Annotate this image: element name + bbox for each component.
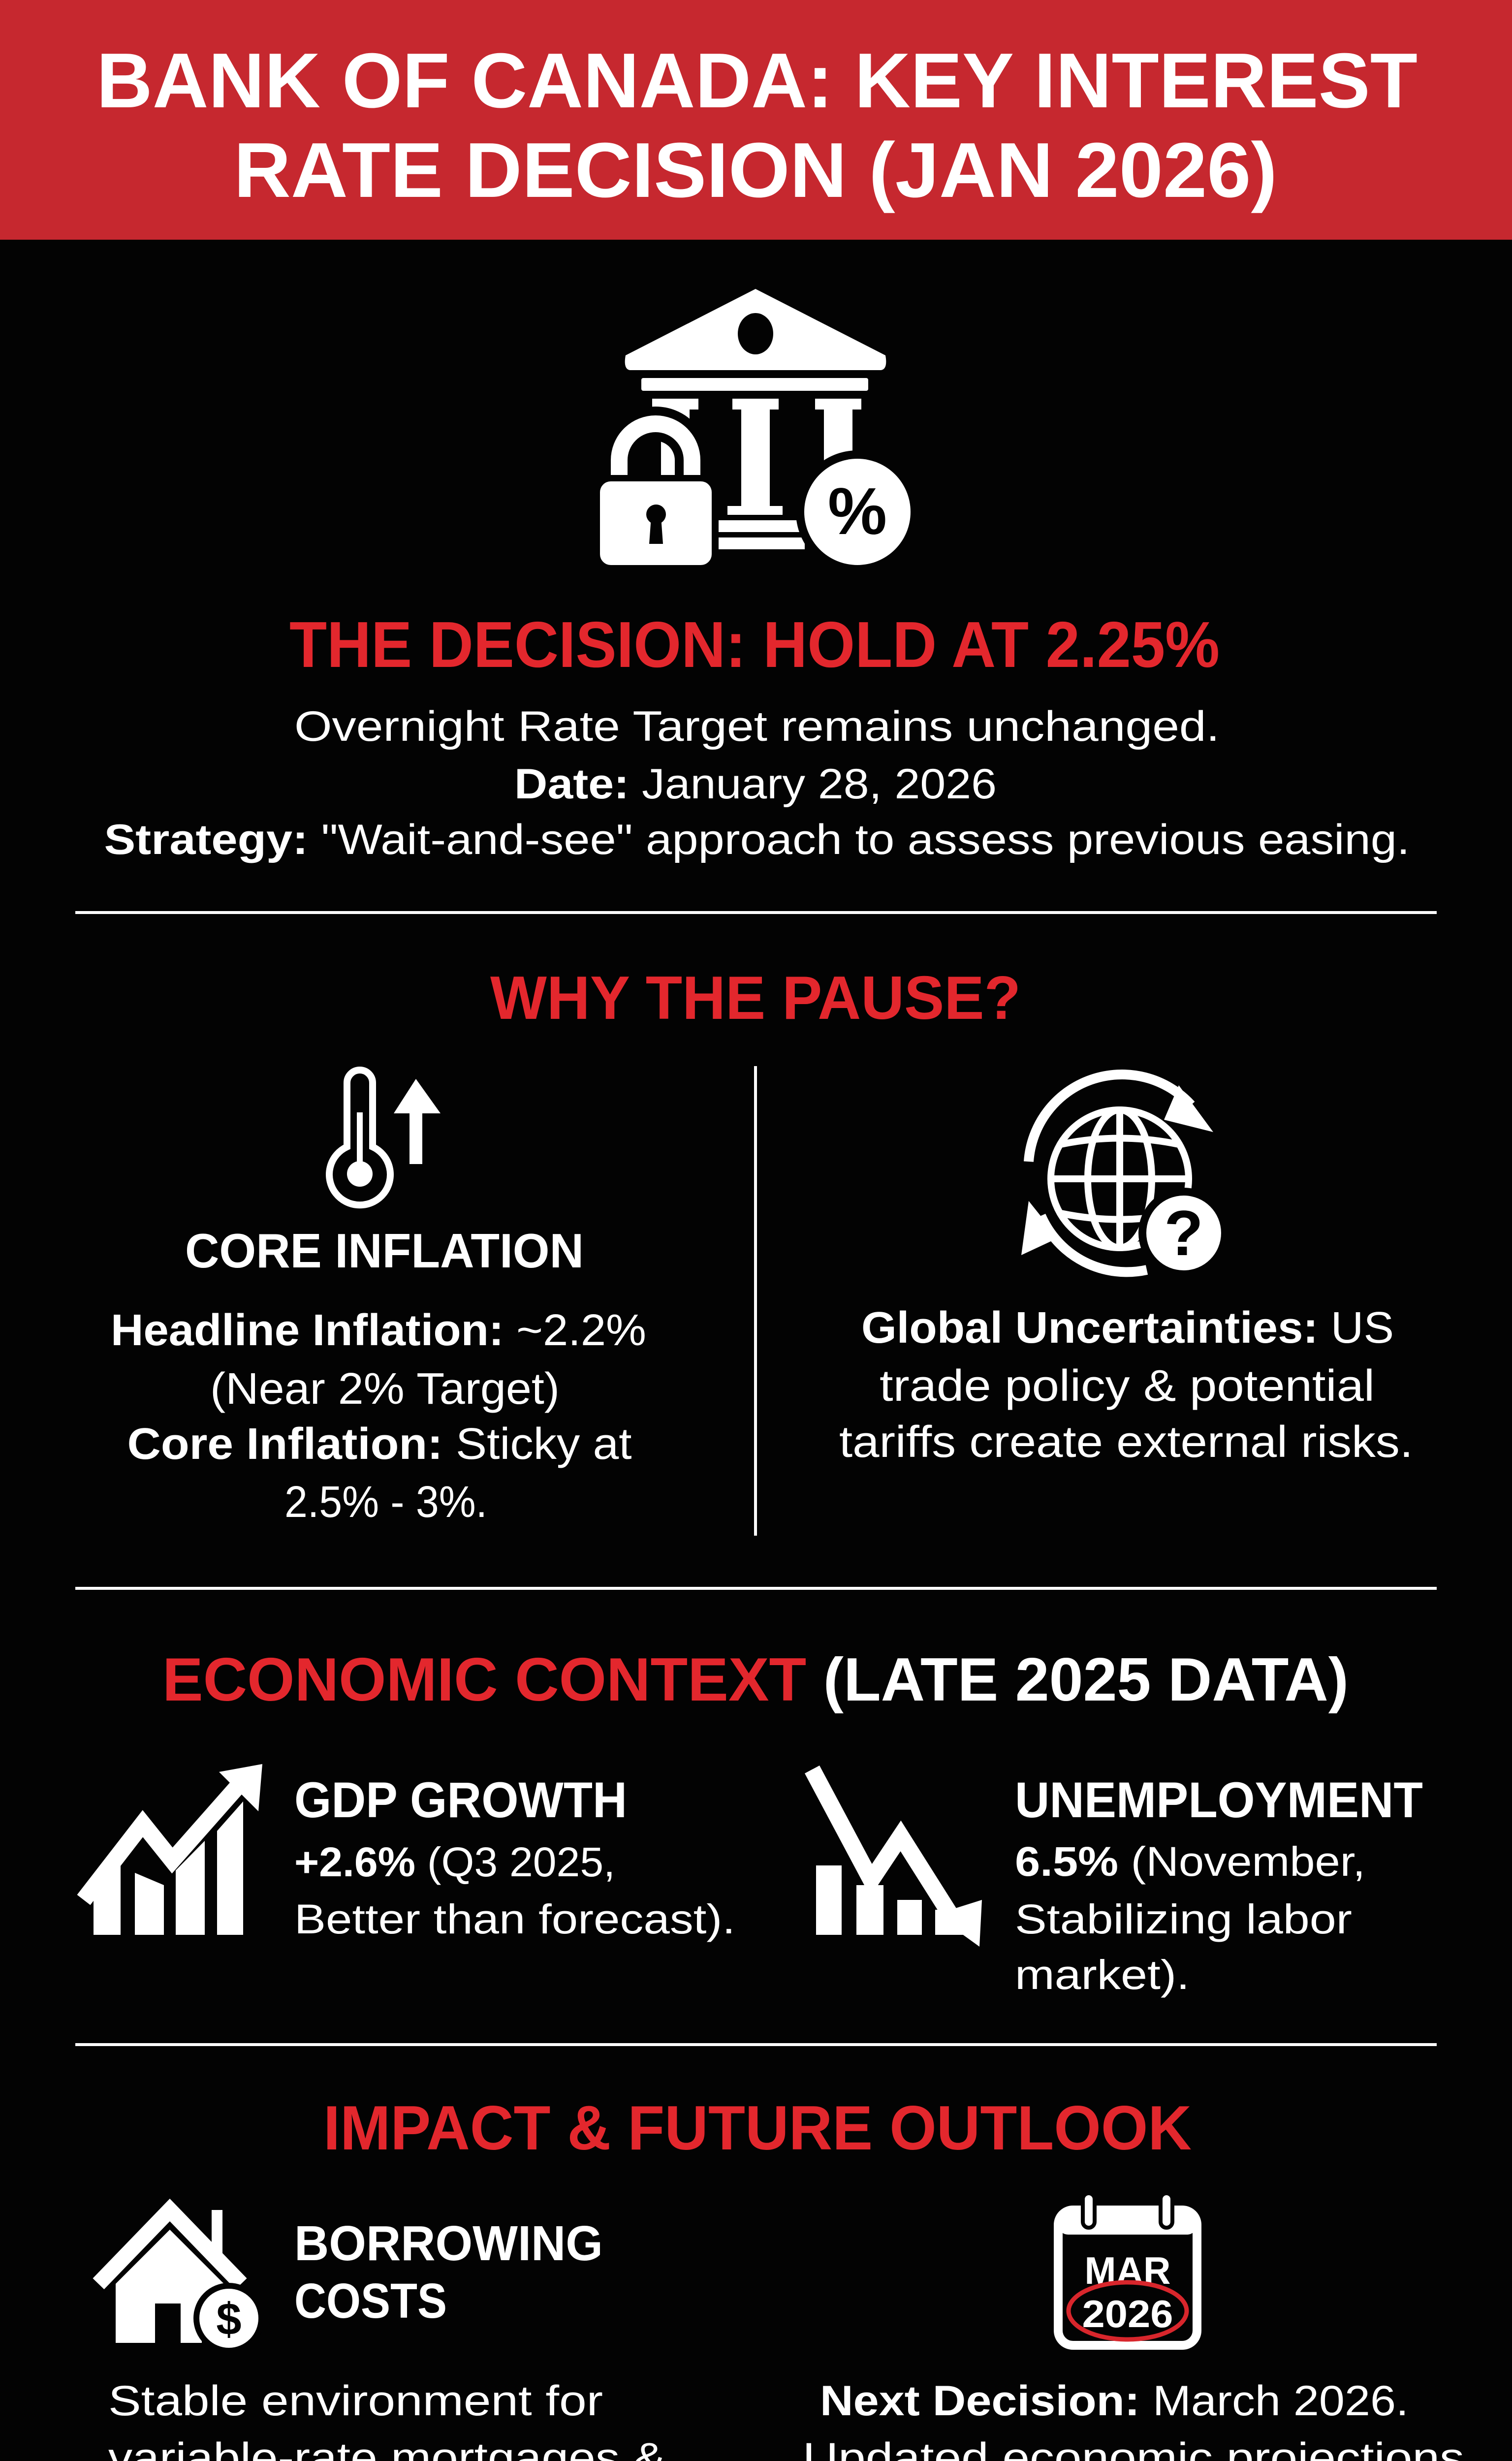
text: next decision: Next Decision: March 2026. xyxy=(820,2377,1409,2425)
panel: borrowing costs xyxy=(98,2210,665,2461)
icon: calendar March 2026 xyxy=(1058,2193,1197,2345)
text: global uncertainties: tariffs create external risks. xyxy=(839,1418,1413,1467)
icon: house with dollar: $ xyxy=(216,2294,242,2344)
text: unemployment figures xyxy=(1015,1838,1365,1998)
panel: unemployment xyxy=(812,1769,1423,1998)
text: borrowing costs: Stable environment for xyxy=(108,2377,603,2425)
subheading: borrowing costs xyxy=(294,2216,603,2329)
panel: global uncertainties xyxy=(839,1074,1413,1467)
text: inflation figures: Core Inflation: Sticky at xyxy=(127,1420,631,1469)
text: unemployment figures: Stabilizing labor xyxy=(1015,1896,1352,1942)
text: inflation figures xyxy=(111,1306,646,1527)
title: BANK OF CANADA: KEY INTEREST xyxy=(96,37,1418,124)
title xyxy=(96,37,1418,214)
subheading: borrowing costs: COSTS xyxy=(294,2273,447,2329)
icon: calendar March 2026: MAR xyxy=(1085,2249,1170,2292)
text: global uncertainties: trade policy & potential xyxy=(880,1361,1375,1411)
text: gdp figures: Better than forecast). xyxy=(294,1896,735,1942)
subheading: core inflation: CORE INFLATION xyxy=(185,1224,584,1278)
text: global uncertainties: Global Uncertainties: US xyxy=(861,1303,1394,1353)
text: gdp figures xyxy=(294,1839,735,1942)
heading: the decision: THE DECISION: HOLD AT 2.25% xyxy=(289,608,1220,681)
heading: impact & future outlook: IMPACT & FUTURE OUTLOOK xyxy=(323,2093,1192,2163)
icon: thermometer with up arrow xyxy=(329,1070,441,1205)
icon: bank with lock and percent: % xyxy=(828,474,887,548)
decision details text: Date: January 28, 2026 xyxy=(514,760,997,808)
heading: economic context: ECONOMIC CONTEXT (LATE 2025 DATA) xyxy=(162,1646,1349,1714)
decision details text xyxy=(104,703,1410,863)
subheading: borrowing costs: BORROWING xyxy=(294,2216,603,2271)
header band xyxy=(0,0,1512,240)
text: inflation figures: (Near 2% Target) xyxy=(210,1364,560,1414)
text: global uncertainties xyxy=(839,1303,1413,1467)
text: inflation figures: 2.5% - 3%. xyxy=(284,1478,487,1527)
decision details text: Strategy: "Wait-and-see" approach to assess previous easing. xyxy=(104,816,1410,863)
heading: why the pause: WHY THE PAUSE? xyxy=(490,964,1021,1032)
text: gdp figures: +2.6% (Q3 2025, xyxy=(294,1839,615,1885)
decision details text: Overnight Rate Target remains unchanged. xyxy=(294,703,1220,750)
subheading: gdp growth: GDP GROWTH xyxy=(294,1772,627,1828)
panel: next decision xyxy=(803,2193,1464,2461)
text: unemployment figures: 6.5% (November, xyxy=(1015,1838,1365,1885)
icon: calendar March 2026: 2026 xyxy=(1082,2292,1173,2335)
panel: global uncertainties: ? xyxy=(1164,1197,1203,1269)
subheading: unemployment: UNEMPLOYMENT xyxy=(1015,1772,1423,1828)
text: next decision xyxy=(803,2377,1464,2461)
icon: rising bar chart xyxy=(84,1764,262,1935)
text: borrowing costs xyxy=(108,2377,665,2461)
percent xyxy=(796,450,919,573)
icon: house with dollar xyxy=(98,2210,264,2354)
text: inflation figures: Headline Inflation: ~2.2% xyxy=(111,1306,646,1355)
icon: falling bar chart xyxy=(812,1769,982,1947)
panel: core inflation xyxy=(111,1070,646,1527)
icon: globe with arrows and question mark xyxy=(1021,1074,1229,1278)
title: RATE DECISION (JAN 2026) xyxy=(234,127,1277,214)
icon: bank with lock and percent xyxy=(593,289,919,573)
text: unemployment figures: market). xyxy=(1015,1952,1190,1998)
lock xyxy=(619,424,692,485)
panel: gdp growth xyxy=(84,1764,735,1942)
